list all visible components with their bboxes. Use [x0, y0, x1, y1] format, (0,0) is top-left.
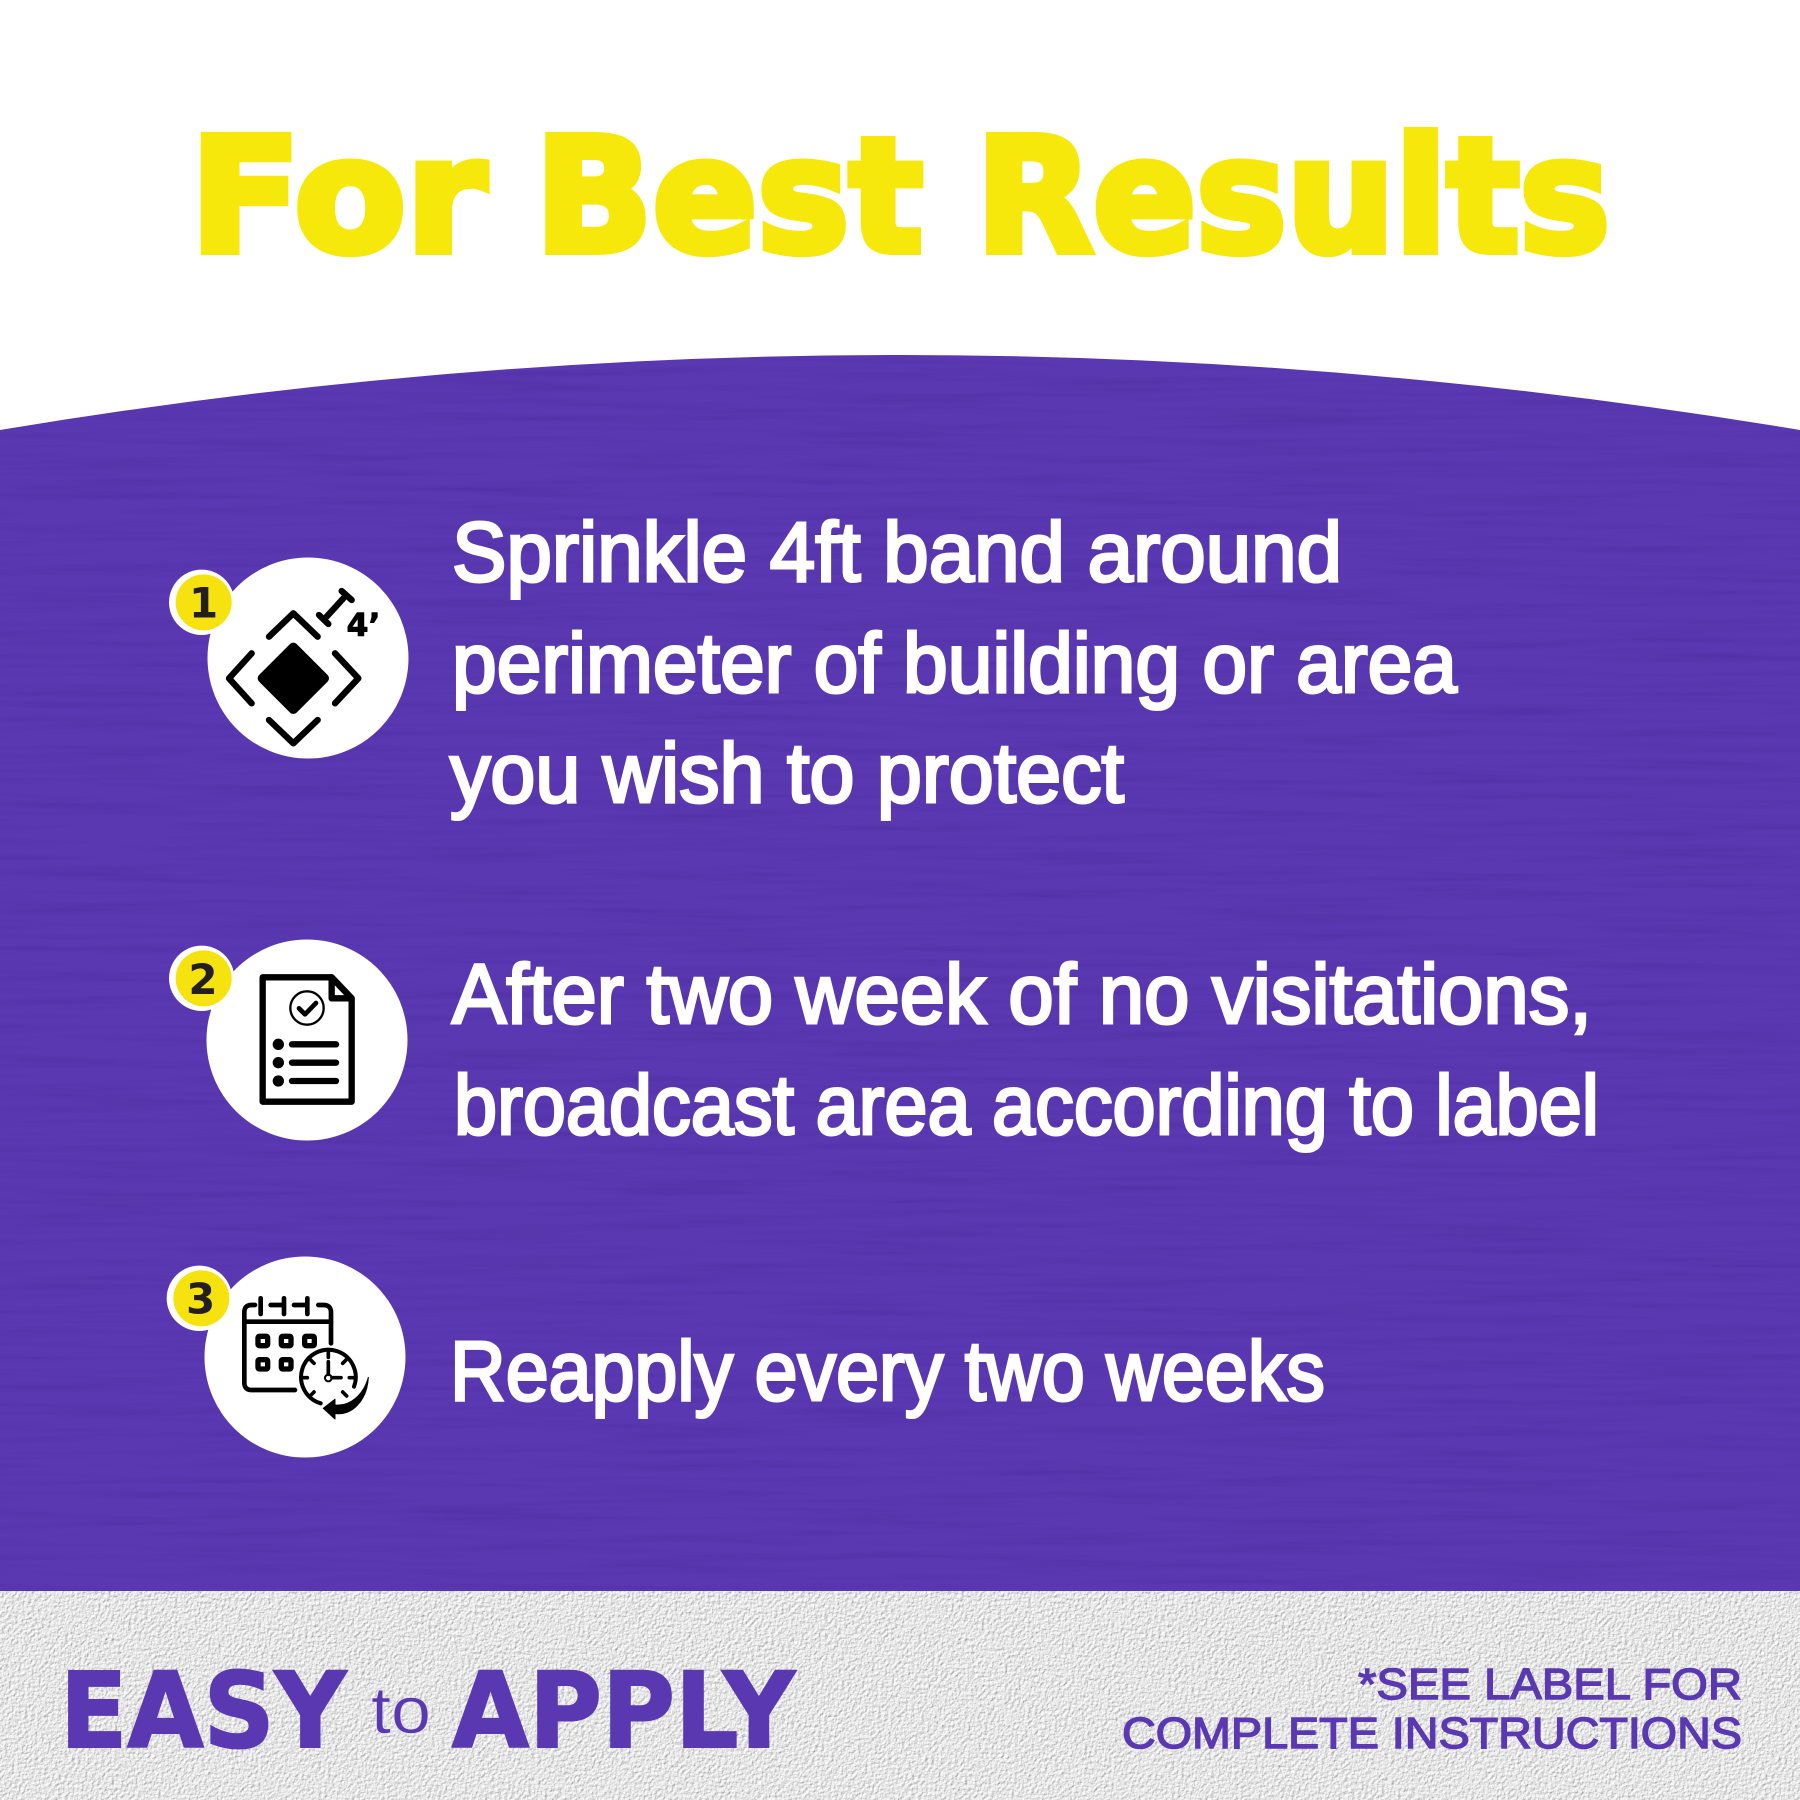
step 3 text: Reapply every two weeks [450, 1324, 1325, 1418]
title [190, 105, 1610, 289]
footer note: see label [1122, 1660, 1742, 1758]
step 2 text: After two week of no visitations, [452, 947, 1592, 1041]
step 2 white circle [206, 940, 408, 1140]
step 3 [167, 1256, 1325, 1458]
footer heading: easy to apply: APPLY [452, 1650, 797, 1772]
step 1 text: perimeter of building or area [452, 616, 1457, 710]
badge: number 2: 2 [188, 955, 218, 1004]
badge: number 1: 1 [189, 578, 218, 627]
footer heading: easy to apply: EASY [60, 1650, 348, 1772]
panel: textured footer band [0, 1591, 1800, 1800]
badge: number 2 [169, 946, 234, 1011]
footer heading: easy to apply [60, 1650, 797, 1772]
step 2 text: broadcast area according to label [454, 1058, 1599, 1152]
title: Best [535, 105, 923, 289]
step 2 [169, 940, 1599, 1152]
badge: number 3: 3 [186, 1275, 215, 1324]
step 1 [169, 505, 1457, 820]
step 3 white circle [204, 1256, 406, 1458]
badge: number 1 [169, 570, 234, 635]
footer note: see label: *SEE LABEL FOR [1358, 1660, 1742, 1709]
title: Results [976, 105, 1610, 289]
panel: purple steps background [0, 355, 1800, 1592]
step 1 text: you wish to protect [450, 726, 1124, 820]
icon: checklist document [263, 977, 352, 1102]
icon: perimeter band [229, 591, 380, 743]
badge: number 3 [167, 1266, 232, 1331]
icon: calendar with clock [244, 1298, 368, 1419]
title: For [190, 105, 486, 289]
step 2 text [452, 947, 1599, 1152]
icon: perimeter band: 4’ [347, 607, 380, 643]
step 1 text [450, 505, 1457, 820]
footer note: see label: COMPLETE INSTRUCTIONS [1122, 1709, 1742, 1758]
step 1 text: Sprinkle 4ft band around [452, 505, 1342, 599]
step 1 white circle [208, 558, 408, 758]
footer heading: easy to apply: to [371, 1673, 431, 1747]
